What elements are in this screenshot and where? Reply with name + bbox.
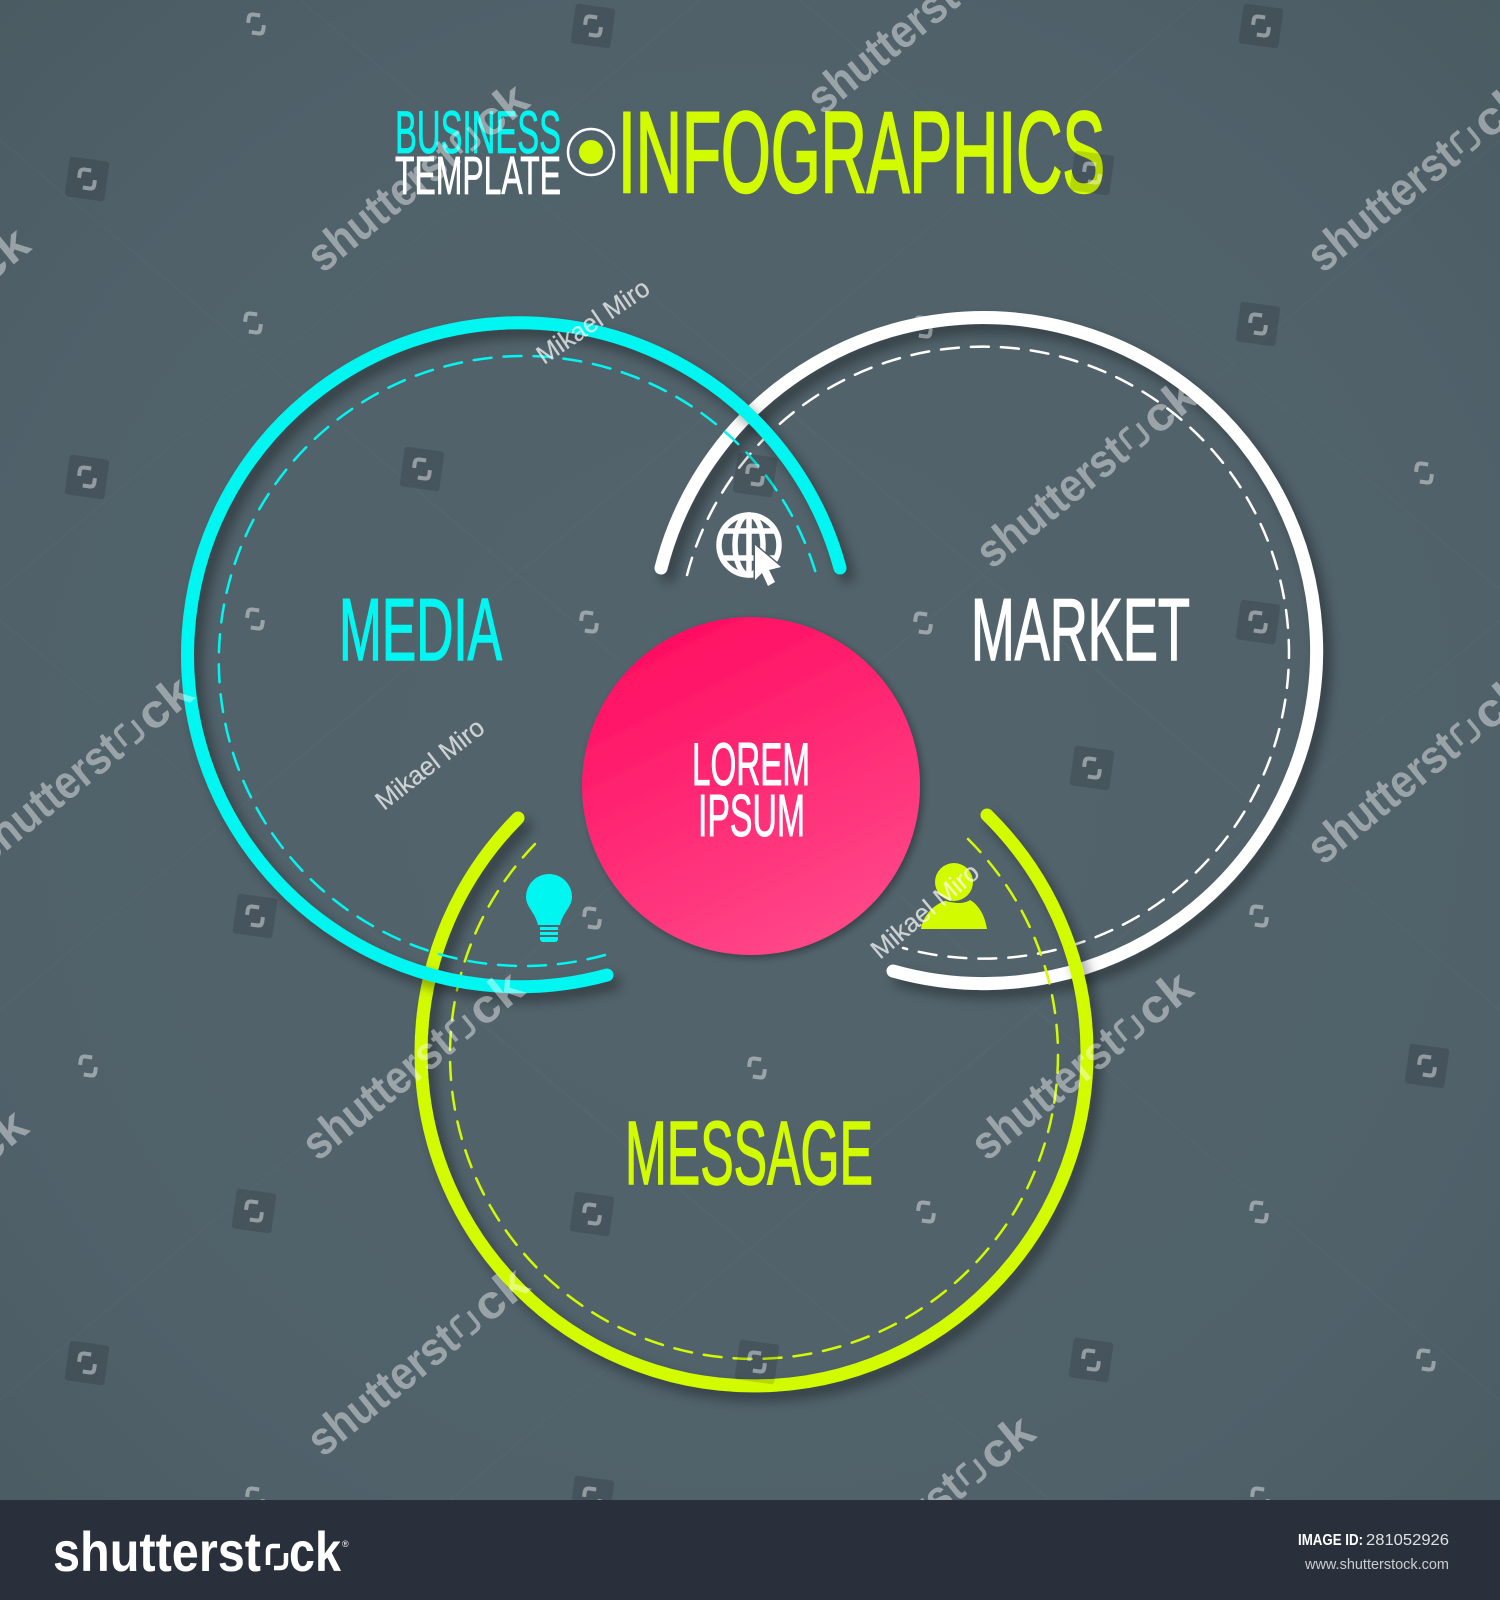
title: business template: BUSINESS	[395, 99, 561, 166]
footer logo: ®	[342, 1539, 349, 1549]
ring: message	[421, 815, 1087, 1386]
title: target icon	[568, 129, 614, 175]
watermark layer: shutterst	[1296, 720, 1468, 874]
ring: media	[188, 323, 840, 987]
watermark layer: Mikael Miro	[531, 272, 655, 370]
watermark layer: ck	[461, 71, 539, 148]
footer logo: shutterst	[53, 1520, 261, 1583]
center text: LOREM	[692, 731, 810, 798]
label: message: MESSAGE	[625, 1104, 873, 1204]
watermark layer: shutterst	[965, 424, 1137, 578]
footer bar	[0, 1500, 1500, 1600]
watermark layer: ck	[125, 664, 203, 741]
watermark layer: shutterst	[1296, 128, 1468, 282]
watermark layer: shutterst	[291, 1016, 463, 1170]
center text: IPSUM	[698, 783, 805, 849]
icon: light bulb	[526, 874, 572, 942]
title	[395, 89, 1105, 217]
watermark layer: Mikael Miro	[865, 857, 985, 965]
ring: market	[661, 318, 1317, 984]
label: media: MEDIA	[339, 580, 502, 679]
footer image id: 281052926	[1366, 1532, 1449, 1549]
watermark layer: ck	[1130, 367, 1208, 444]
icon: globe with cursor	[719, 515, 781, 586]
title: infographics: INFOGRAPHICS	[618, 89, 1105, 217]
center circle	[582, 617, 920, 955]
watermark layer: shutterst	[296, 128, 468, 282]
watermark layer: ck	[461, 1255, 539, 1332]
watermark layer: shutterst	[960, 1016, 1132, 1170]
watermark layer: ck	[1125, 959, 1203, 1036]
watermark layer: Mikael Miro	[369, 712, 490, 816]
footer image id	[1298, 1532, 1449, 1549]
footer image id: IMAGE ID:	[1298, 1532, 1363, 1549]
watermark layer: shutterst	[296, 1312, 468, 1466]
title: business template	[395, 99, 561, 206]
watermark layer: ck	[456, 959, 534, 1036]
icon: person	[921, 863, 987, 929]
label: market: MARKET	[971, 580, 1190, 679]
watermark layer: ck	[967, 1403, 1045, 1480]
footer url: www.shutterstock.com	[1304, 1556, 1449, 1573]
footer logo: ck	[289, 1520, 342, 1583]
title: business template: TEMPLATE	[395, 146, 561, 206]
center text	[692, 731, 810, 849]
